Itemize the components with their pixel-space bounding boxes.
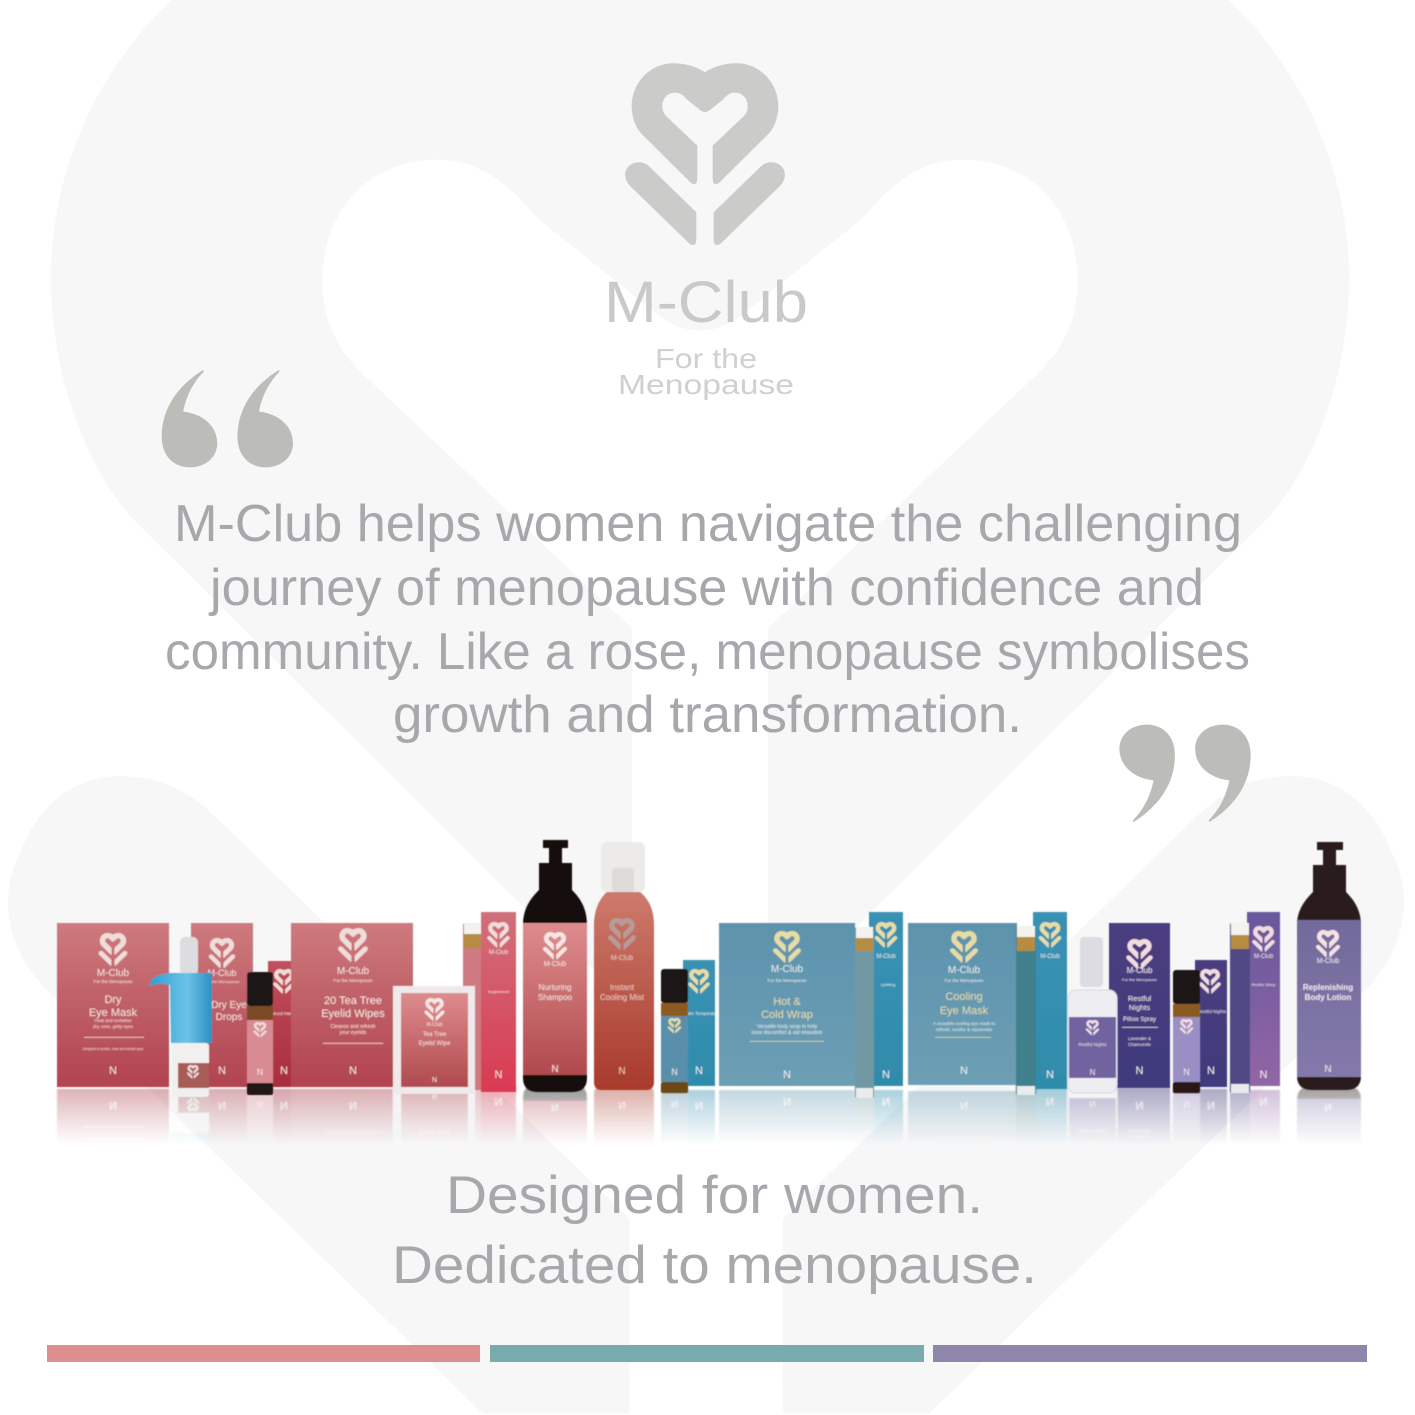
quote text: community. Like a rose, menopause symbolises: [165, 623, 1250, 681]
icon: heart flower logo: [625, 63, 785, 245]
product: Hot & Cold Wrap box: [719, 923, 855, 1086]
product: Dry Eye Mask box: Eye Mask: [89, 1007, 138, 1019]
product: Nurturing Shampoo bottle: N: [551, 1064, 559, 1075]
product: small teal box: [683, 960, 721, 1086]
product: Hot & Cold Wrap box: Hot &: [773, 996, 801, 1008]
product: tall red box: N: [495, 1069, 503, 1081]
product: Tea Tree Eyelid Wipe sachet: M-Club: [426, 1022, 443, 1028]
product: Instant Cooling Mist can: M-Club: [611, 955, 633, 962]
tagline: For the: For the: [655, 343, 757, 374]
bar: purple: [933, 1345, 1367, 1362]
product: tall blue box one: N: [882, 1069, 890, 1081]
product: Hot & Cold Wrap box: N: [783, 1069, 791, 1081]
product: Cooling Eye Mask box: [908, 923, 1017, 1085]
product: Nurturing Shampoo bottle: M-Club: [544, 961, 566, 968]
product: tall blue box two: M-Club: [1040, 954, 1060, 960]
product: Hot & Cold Wrap box: ease discomfort & aid relaxation: [751, 1030, 823, 1036]
product: clear tube three: [1230, 923, 1250, 1093]
icon: opening quotation mark: [162, 370, 293, 467]
product: 20 Tea Tree Eyelid Wipes box: N: [349, 1065, 357, 1077]
quote text: journey of menopause with confidence and: [208, 559, 1204, 617]
bar: rose: [47, 1345, 480, 1362]
product: Instant Cooling Mist can: Cooling Mist: [600, 993, 645, 1002]
product: Restful Nights Pillow Spray box: Pillow Spray: [1123, 1017, 1156, 1023]
product: 20 Tea Tree Eyelid Wipes box: M-Club: [337, 966, 370, 977]
quote text: [165, 495, 1250, 744]
product reflection: [56, 1085, 1362, 1140]
product: Replenishing Body Lotion bottle: [1297, 842, 1361, 1090]
product: Dry Eye Mask box: Heat and revitalise: [94, 1018, 132, 1023]
product: Cooling Eye Mask box: N: [960, 1065, 968, 1077]
product: small red box: [268, 961, 303, 1087]
product: Dry Eye Mask box: Dry: [104, 994, 122, 1006]
product: Restful Nights Pillow Spray box: N: [1136, 1065, 1144, 1077]
product: Replenishing Body Lotion bottle: Body Lotion: [1305, 993, 1351, 1002]
product: Restful Nights Pillow Spray box: M-Club: [1127, 966, 1153, 975]
slogan: Designed for women.: [446, 1166, 983, 1225]
product: 20 Tea Tree Eyelid Wipes box: 20 Tea Tree: [324, 995, 382, 1007]
brand logo with wordmark: [604, 63, 808, 400]
product: Replenishing Body Lotion bottle: Replenishing: [1303, 983, 1353, 992]
product: Cooling Eye Mask box: Eye Mask: [940, 1005, 989, 1017]
product: Tea Tree Eyelid Wipe sachet: Tea Tree: [423, 1032, 447, 1038]
product: Nurturing Shampoo bottle: Nurturing: [539, 983, 571, 992]
product: glass spray bottle: N: [1090, 1068, 1096, 1077]
product: Dry Eye Drops box: For the Menopause: [205, 979, 240, 984]
product: tall blue box two: N: [1046, 1069, 1054, 1081]
product: Restful Nights Pillow Spray box: Nights: [1129, 1003, 1150, 1012]
product: Replenishing Body Lotion bottle: M-Club: [1317, 958, 1339, 965]
product: Dry Eye Drops box: [191, 923, 253, 1087]
quote text: M-Club helps women navigate the challenging: [174, 495, 1242, 553]
product: tall blue box one: M-Club: [876, 954, 896, 960]
product: tall purple box: N: [1260, 1069, 1268, 1081]
product: Hot & Cold Wrap box: Cold Wrap: [761, 1009, 813, 1021]
product: clear tube two: [1016, 926, 1036, 1095]
product: tall blue box one: [869, 912, 903, 1086]
product: Hot & Cold Wrap box: Versatile body wrap to help: [757, 1024, 817, 1030]
product: small teal box: N: [695, 1065, 703, 1077]
product: Restful Nights Pillow Spray box: For the Menopause: [1122, 977, 1158, 982]
product: Cooling Eye Mask box: refresh, soothe & rejuvenate: [936, 1027, 993, 1032]
product: small red box: Mood Harmony: [272, 1011, 303, 1016]
slogan: Dedicated to menopause.: [392, 1236, 1037, 1295]
product: tall red box: [481, 912, 516, 1092]
product: pink roll-on: [247, 972, 273, 1095]
product: Restful Nights Pillow Spray box: [1109, 923, 1170, 1088]
product: small purple box: [1195, 960, 1227, 1087]
product: Dry Eye Mask box: N: [109, 1065, 117, 1077]
product: tall red box: M-Club: [489, 950, 509, 956]
product: Instant Cooling Mist can: Instant: [610, 983, 635, 992]
product: small teal box: Calm Temperature: [684, 1011, 721, 1016]
tagline: Menopause: Menopause: [618, 369, 794, 400]
product: glass spray bottle: Restful Nights: [1078, 1042, 1107, 1047]
product: Cooling Eye Mask box: M-Club: [948, 965, 981, 976]
product: 20 Tea Tree Eyelid Wipes box: For the Menopause: [333, 978, 373, 983]
colour bars: [47, 1345, 1367, 1362]
product: small red box: N: [280, 1065, 288, 1077]
icon: closing quotation mark: [1119, 725, 1251, 822]
product: Restful Nights Pillow Spray box: Restful: [1128, 994, 1152, 1003]
product: tall blue box two: [1033, 912, 1067, 1089]
product: 20 Tea Tree Eyelid Wipes box: Eyelid Wipes: [321, 1008, 385, 1020]
quote text: growth and transformation.: [393, 686, 1022, 744]
product: tall purple box: M-Club: [1254, 954, 1274, 960]
product: tall blue box one: Uplifting: [881, 982, 895, 987]
product: Dry Eye Drops box: M-Club: [207, 968, 237, 978]
product line-up: [57, 840, 1361, 1098]
product: Cooling Eye Mask box: A reusable cooling eye mask to: [933, 1021, 996, 1026]
product: 20 Tea Tree Eyelid Wipes box: Cleanse and refresh: [330, 1024, 376, 1030]
product: Dry Eye Mask box: M-Club: [97, 968, 130, 979]
product: Restful Nights Pillow Spray box: Lavender &: [1128, 1036, 1151, 1041]
product: Tea Tree Eyelid Wipe sachet: [393, 986, 475, 1094]
product: Cooling Eye Mask box: For the Menopause: [944, 978, 984, 983]
product: Tea Tree Eyelid Wipe sachet: Eyelid Wipe: [419, 1041, 451, 1047]
slogan: [392, 1166, 1037, 1295]
product: purple roll-on: [1173, 970, 1200, 1093]
product: Dry Eye Mask box: dry, sore, gritty eyes: [93, 1024, 134, 1029]
product: Dry Eye Mask box: For the Menopause: [93, 979, 133, 984]
brand name: M-Club: [604, 270, 808, 335]
product: Dry Eye Drops box: Drops: [216, 1012, 242, 1023]
product: Nurturing Shampoo bottle: [523, 840, 587, 1092]
product: Instant Cooling Mist can: N: [618, 1066, 626, 1077]
product: Dry Eye Mask box: Designed to soothe, relax and refresh eyes: [83, 1047, 144, 1051]
product: pink roll-on: N: [257, 1067, 263, 1077]
product: tall purple box: [1247, 912, 1280, 1086]
product: blue eye dropper: [150, 937, 212, 1097]
product: teal roll-on: [661, 969, 688, 1093]
product: Dry Eye Drops box: N: [218, 1065, 226, 1077]
product: Cooling Eye Mask box: Cooling: [945, 991, 983, 1003]
product: Hot & Cold Wrap box: M-Club: [771, 964, 804, 975]
product: Replenishing Body Lotion bottle: N: [1324, 1064, 1332, 1075]
product: Dry Eye Drops box: Dry Eye: [211, 1000, 247, 1011]
product: teal roll-on: N: [671, 1067, 678, 1077]
product: purple roll-on: N: [1183, 1067, 1190, 1077]
product: tall purple box: Restful Sleep: [1252, 982, 1276, 987]
bar: teal: [490, 1345, 924, 1362]
product: clear tube one: [855, 927, 874, 1098]
product: 20 Tea Tree Eyelid Wipes box: [291, 923, 413, 1087]
product: 20 Tea Tree Eyelid Wipes box: your eyelids: [340, 1030, 367, 1036]
product: Nurturing Shampoo bottle: Shampoo: [538, 993, 573, 1002]
product: small purple box: N: [1207, 1065, 1215, 1077]
product: Dry Eye Mask box: [57, 923, 169, 1087]
product: Restful Nights Pillow Spray box: Chamomile: [1128, 1042, 1151, 1047]
product: tall red box: Supplement: [488, 989, 510, 994]
product: Hot & Cold Wrap box: For the Menopause: [767, 978, 807, 983]
product: Tea Tree Eyelid Wipe sachet: N: [432, 1077, 437, 1084]
product: tube behind sachet: [463, 923, 483, 1090]
product: small purple box: Restful Nights: [1198, 1009, 1227, 1014]
product: Instant Cooling Mist can: [594, 842, 654, 1090]
product: glass spray bottle: [1068, 937, 1117, 1093]
